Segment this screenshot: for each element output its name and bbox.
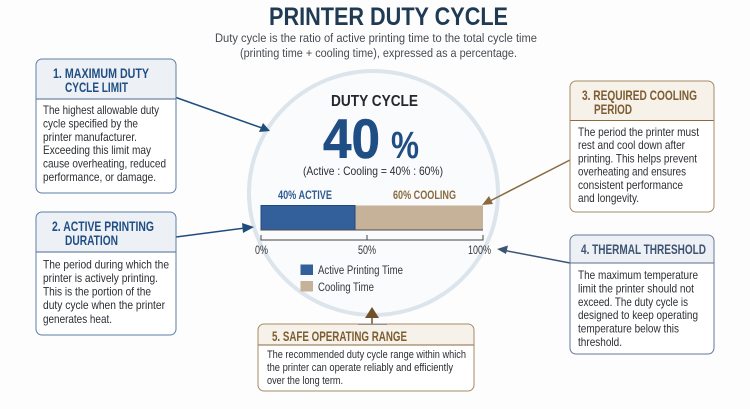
title: PRINTER DUTY CYCLE xyxy=(269,3,508,31)
stacked bar chart xyxy=(261,206,483,230)
heading xyxy=(53,66,149,95)
panel: 5. safe operating range xyxy=(258,324,474,391)
body text: performance, or damage. xyxy=(43,171,156,184)
body text: the printer can operate reliably and efficiently xyxy=(267,362,453,374)
arrow: card 2 to bar xyxy=(176,223,254,237)
bar labels: 40% ACTIVE xyxy=(278,188,332,202)
panel: central duty cycle circle xyxy=(249,71,498,315)
body text: cause overheating, reduced xyxy=(43,158,166,170)
body text: cycle specified by the xyxy=(43,118,138,130)
body text xyxy=(578,269,698,349)
body text: designed to keep operating xyxy=(578,309,698,322)
panel: 1. maximum duty cycle limit xyxy=(36,59,176,193)
panel: 3. required cooling period xyxy=(570,81,714,212)
big percentage value: % xyxy=(391,125,419,167)
body text: duty cycle when the printer xyxy=(43,299,165,312)
heading: DURATION xyxy=(65,233,118,248)
body text: over the long term. xyxy=(267,375,343,387)
big percentage value: 40 xyxy=(323,107,380,170)
legend: Cooling Time xyxy=(318,282,374,294)
body text: Exceeding this limit may xyxy=(43,144,151,157)
body text xyxy=(578,126,700,205)
body text: consistent performance xyxy=(578,179,683,192)
body text: This is the portion of the xyxy=(43,286,151,298)
percentage axis: 50% xyxy=(358,245,376,257)
body text: printer is actively printing. xyxy=(43,272,158,285)
body text: overheating and ensures xyxy=(578,166,686,178)
body text: The maximum temperature xyxy=(578,269,698,282)
arrow: card 1 to circle xyxy=(176,98,270,132)
body text: printing. This helps prevent xyxy=(578,152,698,166)
body text: The recommended duty cycle range within which xyxy=(267,349,466,361)
body text: exceed. The duty cycle is xyxy=(578,296,688,309)
legend xyxy=(300,264,403,294)
heading: CYCLE LIMIT xyxy=(65,80,129,95)
heading xyxy=(582,88,697,117)
body text: limit the printer should not xyxy=(578,282,695,296)
big percentage value xyxy=(323,107,419,170)
body text: threshold. xyxy=(578,336,622,349)
body text: printer manufacturer. xyxy=(43,131,137,144)
body text xyxy=(43,258,169,326)
percentage axis: 0% xyxy=(255,245,268,257)
body text: rest and cool down after xyxy=(578,139,685,152)
heading: 3. REQUIRED COOLING xyxy=(582,88,697,103)
heading: 5. SAFE OPERATING RANGE xyxy=(272,329,407,344)
circle heading: DUTY CYCLE xyxy=(331,93,418,110)
heading: 2. ACTIVE PRINTING xyxy=(52,219,154,234)
body text: The highest allowable duty xyxy=(43,104,159,117)
arrow: card 3 to bar xyxy=(482,160,570,205)
bar labels xyxy=(278,188,456,202)
legend: Active Printing Time xyxy=(318,265,403,277)
heading xyxy=(52,219,154,248)
body text: temperature below this xyxy=(578,322,679,336)
subtitle: Duty cycle is the ratio of active printing time to the total cycle time xyxy=(215,31,537,45)
heading: PERIOD xyxy=(594,102,632,117)
body text xyxy=(43,104,166,184)
heading: 1. MAXIMUM DUTY xyxy=(53,66,149,81)
bar labels: 60% COOLING xyxy=(393,188,456,202)
body text: The period during which the xyxy=(43,258,169,272)
arrow: card 5 to circle xyxy=(365,307,379,324)
panel: 4. thermal threshold xyxy=(570,235,714,354)
subtitle: (printing time + cooling time), expressed as a percentage. xyxy=(240,46,517,60)
ratio text: (Active : Cooling = 40% : 60%) xyxy=(303,164,443,178)
subtitle xyxy=(215,31,537,60)
arrow: card 4 to axis xyxy=(497,246,570,263)
percentage axis xyxy=(255,235,491,257)
heading: 4. THERMAL THRESHOLD xyxy=(581,242,706,257)
body text xyxy=(267,349,466,387)
body text: generates heat. xyxy=(43,313,112,326)
panel: 2. active printing duration xyxy=(36,212,176,335)
percentage axis: 100% xyxy=(468,245,491,257)
body text: and longevity. xyxy=(578,192,639,205)
body text: The period the printer must xyxy=(578,126,700,139)
